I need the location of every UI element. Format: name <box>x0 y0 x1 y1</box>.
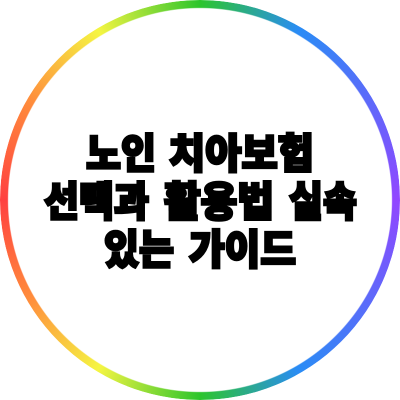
title: 활용법 <box>164 179 274 225</box>
title: 실속 <box>289 179 357 225</box>
title: 있는 <box>104 227 174 273</box>
title: 노인 <box>86 131 156 177</box>
title: 선택과 <box>44 179 149 225</box>
title: 치아보험 <box>169 131 314 177</box>
title: 가이드 <box>189 227 296 273</box>
